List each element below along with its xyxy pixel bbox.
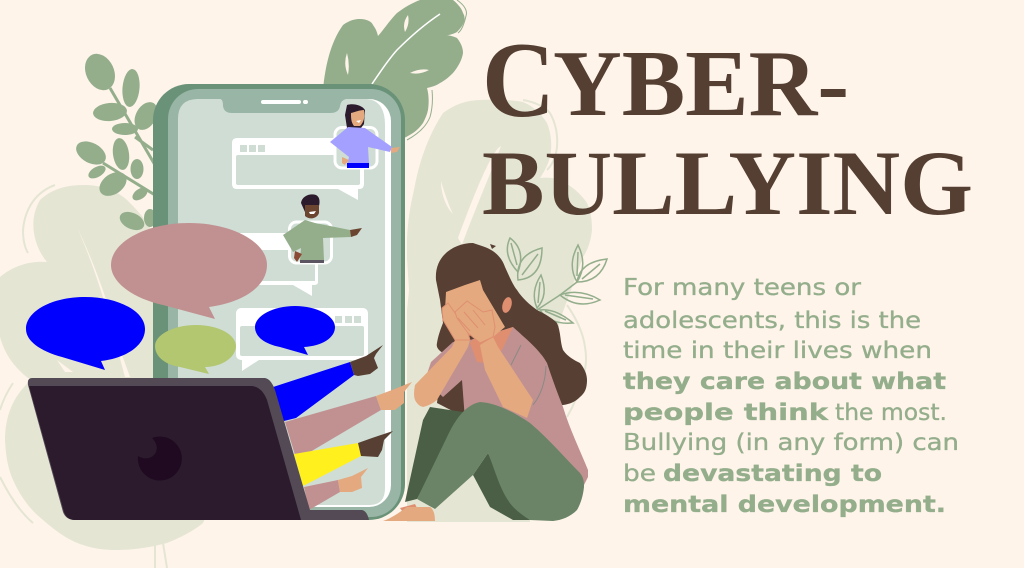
shirt	[425, 327, 588, 487]
arm: blue sleeve	[270, 345, 383, 422]
leaf: left green branch	[72, 49, 162, 234]
phone	[153, 84, 405, 520]
title	[482, 21, 973, 234]
ear	[501, 296, 513, 314]
body text: time in their lives when	[623, 338, 932, 364]
speech bubble: pink	[111, 223, 267, 319]
foot	[400, 504, 418, 515]
arm: small pink sleeve	[304, 468, 368, 510]
arm: yellow sleeve	[294, 431, 393, 486]
front leg	[417, 402, 584, 521]
right arm	[480, 337, 533, 418]
body text: be	[623, 461, 656, 487]
shirt creases	[511, 345, 546, 405]
arm: pink sleeve	[285, 382, 412, 455]
phone speaker	[261, 100, 308, 104]
icon: laptop logo	[138, 437, 182, 481]
body text: adolescents, this is the	[623, 308, 921, 334]
chat box 3	[236, 308, 368, 371]
neck	[470, 327, 513, 363]
leaf: large green top leaf	[323, 0, 467, 140]
phone notch	[220, 99, 346, 113]
speech bubble: small blue	[255, 306, 335, 355]
body text: devastating to	[663, 461, 882, 487]
face	[445, 280, 505, 337]
title: BULLYING	[482, 132, 973, 234]
leaf outline branch	[507, 238, 607, 323]
body text: Bullying (in any form) can	[623, 430, 959, 456]
speech bubble: large blue	[26, 297, 145, 370]
title: YBER-	[553, 32, 849, 136]
girl	[383, 243, 588, 521]
back leg	[405, 407, 463, 502]
hands	[442, 303, 470, 340]
avatar: woman	[330, 104, 400, 168]
body text: mental development.	[623, 492, 946, 518]
body text: For many teens or	[623, 275, 862, 301]
title: C	[482, 21, 555, 140]
background: pale right leaf	[407, 100, 600, 522]
left arm	[414, 340, 470, 407]
laptop	[28, 378, 369, 520]
body text: they care about what	[623, 369, 946, 395]
avatar: man	[283, 194, 362, 263]
hair	[436, 243, 587, 420]
speech bubble: green	[155, 325, 236, 374]
body text	[623, 275, 959, 518]
chat box 2	[240, 233, 318, 296]
body text: people think	[623, 400, 829, 426]
background: pale left foliage	[0, 185, 240, 568]
body text: the most.	[835, 400, 947, 426]
chat box 1	[232, 138, 364, 200]
